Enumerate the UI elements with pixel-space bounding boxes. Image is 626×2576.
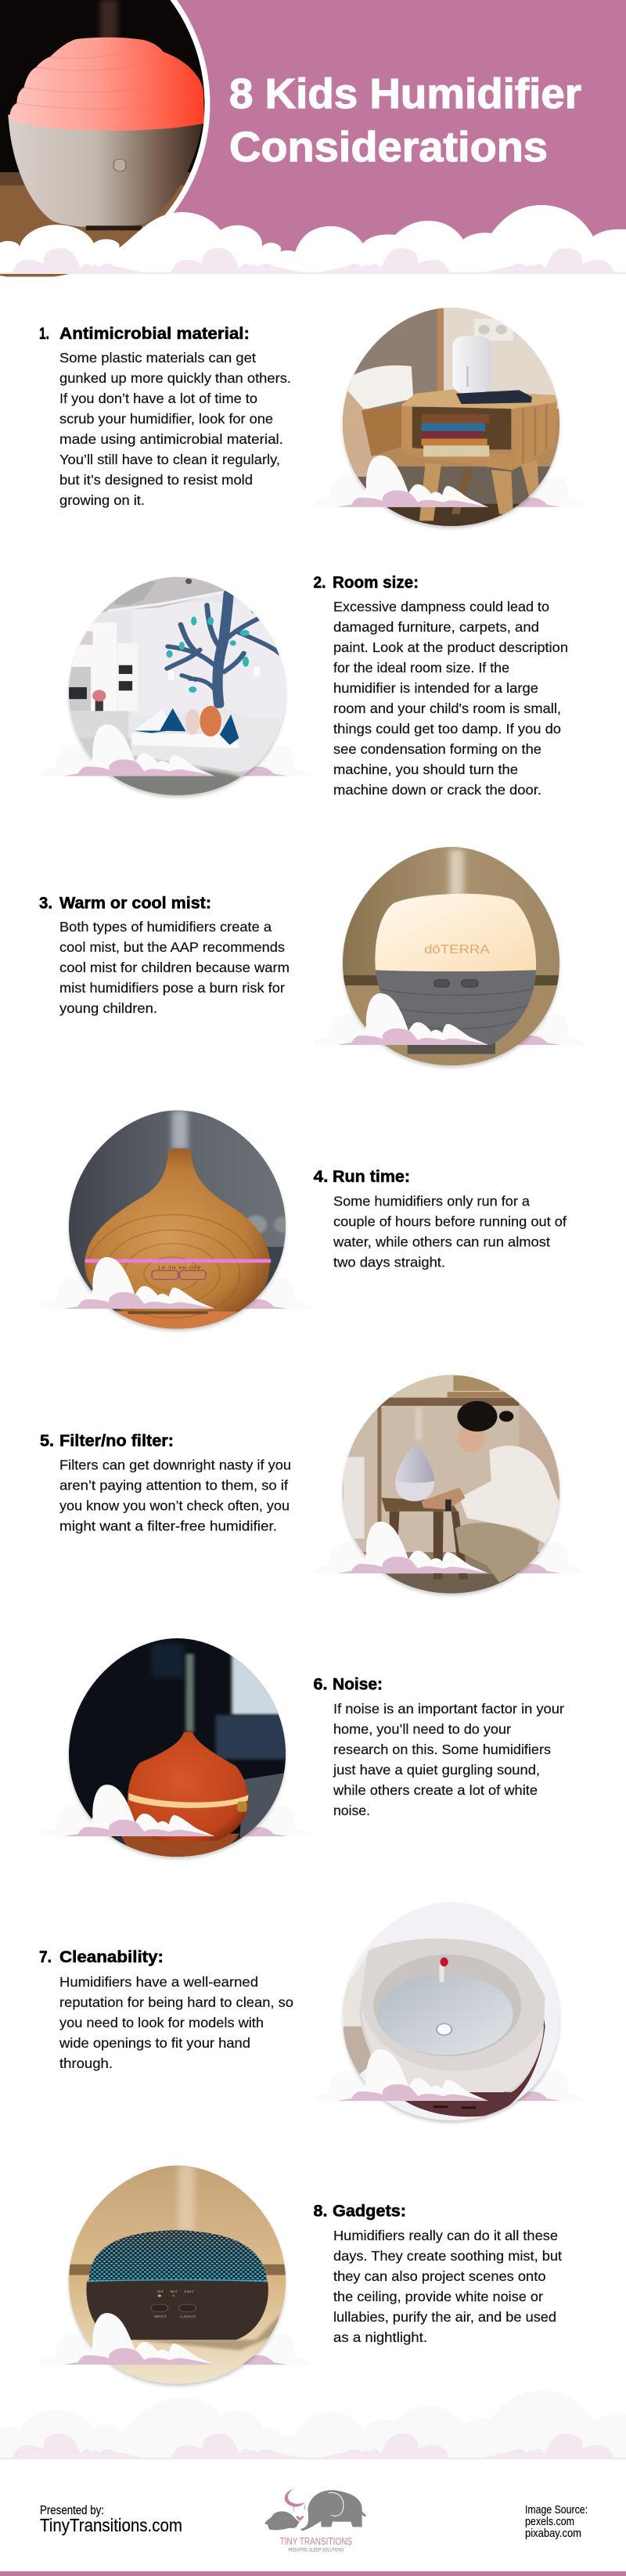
footer: [40, 2488, 588, 2553]
heading 2: 2.: [313, 573, 326, 592]
cloud behind photo: [39, 1805, 313, 1836]
body text 2: machine down or crack the door.: [333, 782, 541, 798]
body text 8: Humidifiers really can do it all these: [333, 2228, 558, 2243]
image source: [525, 2503, 588, 2540]
body text 2: things could get too damp. If you do: [333, 721, 561, 737]
heading 7: 7.: [39, 1947, 52, 1966]
body text 2: machine, you should turn the: [333, 762, 518, 777]
body text 4: two days straight.: [333, 1254, 445, 1270]
heading 8: 8.: [313, 2201, 327, 2220]
cloud in front of photo: [64, 1257, 214, 1309]
body text 4: Some humidifiers only run for a: [333, 1193, 530, 1209]
body text 8: lullabies, purify the air, and be used: [333, 2309, 556, 2325]
heading 5: Filter/no filter:: [59, 1431, 174, 1450]
image source: Image Source:: [525, 2503, 588, 2517]
pale pink clouds: [0, 248, 626, 274]
image source: pexels.com: [525, 2515, 574, 2528]
header banner: [0, 0, 626, 281]
panel: 1 antimicrobial material: [39, 308, 586, 528]
cloud in front of photo: [337, 2049, 488, 2101]
body text 3: cool mist, but the AAP recommends: [59, 939, 285, 955]
title: 8 Kids Humidifier: [229, 70, 581, 117]
heading 3: 3.: [39, 894, 52, 913]
body text 1: You’ll still have to clean it regularly,: [59, 452, 280, 467]
body text 5: might want a filter-free humidifier.: [59, 1519, 277, 1534]
panel: 5 filter or no filter: [40, 1374, 586, 1596]
timer labels on device: 1H 3H 6H OFF: [158, 1266, 201, 1270]
cloud behind photo: [39, 744, 313, 776]
white cloud band: [0, 205, 626, 274]
cloud in front of photo: [64, 724, 214, 776]
heading 1: 1.: [39, 324, 49, 343]
heading 6: 6.: [313, 1675, 327, 1694]
body text 6: home, you’ll need to do your: [333, 1721, 511, 1737]
body text 2: damaged furniture, carpets, and: [333, 619, 539, 635]
cloud behind photo: [312, 1014, 586, 1045]
photo: open humidifier tank: [341, 1902, 560, 2124]
cloud in front of photo: [337, 456, 488, 507]
heading 6: Noise:: [333, 1675, 383, 1694]
body text 1: but it’s designed to resist mold: [59, 472, 253, 488]
panel: 8 gadgets: [39, 2164, 562, 2386]
body text 8: [333, 2228, 562, 2345]
heading 4: Run time:: [333, 1167, 410, 1186]
body text 7: you need to look for models with: [59, 2015, 264, 2030]
heading 5: 5.: [40, 1431, 54, 1450]
body text 8: as a nightlight.: [333, 2329, 427, 2345]
presented by: Presented by:: [40, 2504, 104, 2517]
body text 3: young children.: [59, 1000, 157, 1016]
presented by: [40, 2504, 182, 2535]
body text 8: they can also project scenes onto: [333, 2268, 546, 2284]
body text 6: while others create a lot of white: [333, 1782, 538, 1798]
device labels: MIST: [154, 2315, 167, 2319]
panel: 7 cleanability: [39, 1902, 586, 2124]
header background: [0, 0, 626, 274]
body text 5: aren’t paying attention to them, so if: [59, 1478, 288, 1493]
body text 2: Excessive dampness could lead to: [333, 599, 549, 614]
body text 4: [333, 1193, 567, 1270]
body text 7: through.: [59, 2055, 113, 2071]
body text 8: the ceiling, provide white noise or: [333, 2289, 543, 2304]
body text 3: [59, 919, 290, 1016]
body text 7: wide openings to fit your hand: [59, 2035, 250, 2051]
body text 1: If you don’t have a lot of time to: [59, 391, 257, 406]
device labels: 2H: [156, 2290, 164, 2293]
logo: Tiny Transitions elephants: [264, 2488, 367, 2553]
body text 6: research on this. Some humidifiers: [333, 1742, 551, 1757]
device labels: [154, 2290, 196, 2319]
cloud behind photo: [312, 2070, 586, 2101]
heading 4: 4.: [313, 1167, 329, 1186]
body text 6: If noise is an important factor in your: [333, 1701, 564, 1717]
heading 7: Cleanability:: [59, 1947, 164, 1966]
heading 8: Gadgets:: [333, 2201, 406, 2220]
body text 3: Both types of humidifiers create a: [59, 919, 272, 935]
heading 1: Antimicrobial material:: [59, 324, 250, 343]
panel: 3 warm or cool mist: [39, 847, 586, 1068]
photo: dark mesh diffuser: [69, 2164, 286, 2386]
heading 2: Room size:: [333, 573, 419, 592]
image source: pixabay.com: [525, 2527, 581, 2540]
body text 2: [333, 599, 568, 798]
hero photo: glowing pink humidifier: [0, 0, 224, 276]
body text 2: see condensation forming on the: [333, 741, 541, 757]
cloud behind photo: [312, 476, 586, 507]
body text 7: [59, 1974, 293, 2071]
body text 3: cool mist for children because warm: [59, 960, 290, 975]
presented by: TinyTransitions.com: [40, 2515, 182, 2535]
body text 5: you know you won’t check often, you: [59, 1498, 290, 1514]
body text 6: noise.: [333, 1803, 370, 1818]
body text 2: for the ideal room size. If the: [333, 660, 509, 676]
cloud in front of photo: [64, 1785, 214, 1836]
brand text on device: dōTERRA: [424, 942, 490, 957]
bottom bar: [0, 2571, 626, 2576]
device labels: 10H: [184, 2290, 193, 2293]
photo: doTERRA humidifier: [343, 847, 560, 1068]
body text 7: Humidifiers have a well-earned: [59, 1974, 258, 1990]
photo: nursery with tree mural: [69, 577, 286, 802]
panel: 6 noise: [39, 1638, 564, 1862]
body text 1: scrub your humidifier, look for one: [59, 411, 273, 427]
body text 8: days. They create soothing mist, but: [333, 2248, 562, 2264]
logo: Tiny Transitions elephants: PEDIATRIC SLEEP SOLUTIONS: [288, 2547, 344, 2553]
device labels: LIGHT: [181, 2315, 196, 2319]
photo: wood grain diffuser: [69, 1110, 293, 1333]
footer cloud band: [0, 2390, 626, 2459]
photo: humidifier on bedside table: [343, 308, 560, 528]
body text 6: just have a quiet gurgling sound,: [333, 1762, 540, 1778]
body text 2: paint. Look at the product description: [333, 639, 568, 655]
body text 6: [333, 1701, 564, 1818]
device labels: 5H: [171, 2290, 177, 2293]
cloud in front of photo: [337, 993, 488, 1045]
body text 1: Some plastic materials can get: [59, 350, 256, 366]
panel: 4 run time: [39, 1110, 567, 1333]
body text 4: water, while others can run almost: [333, 1234, 550, 1249]
body text 1: gunked up more quickly than others.: [59, 370, 291, 386]
cloud behind photo: [39, 1277, 313, 1309]
cloud in front of photo: [64, 2313, 214, 2365]
heading 3: Warm or cool mist:: [59, 894, 211, 913]
body text 3: mist humidifiers pose a burn risk for: [59, 980, 285, 996]
panel: 2 room size: [39, 573, 568, 802]
hero photo frame: [0, 0, 207, 281]
photo: red wood diffuser: [69, 1638, 288, 1862]
logo: Tiny Transitions elephants: TINY TRANSITIONS: [280, 2535, 352, 2547]
body text 1: growing on it.: [59, 492, 145, 508]
body text 5: Filters can get downright nasty if you: [59, 1457, 291, 1473]
cloud behind photo: [39, 2333, 313, 2365]
body text 2: humidifier is intended for a large: [333, 680, 538, 696]
title: [229, 70, 581, 171]
body text 7: reputation for being hard to clean, so: [59, 1994, 293, 2010]
body text 1: made using antimicrobial material.: [59, 431, 283, 447]
cloud behind photo: [312, 1542, 586, 1573]
photo: person adjusting humidifier: [343, 1374, 560, 1596]
body text 4: couple of hours before running out of: [333, 1213, 567, 1229]
body text 1: [59, 350, 291, 508]
body text 2: room and your child's room is small,: [333, 701, 561, 716]
title: Considerations: [229, 124, 548, 171]
cloud in front of photo: [337, 1522, 488, 1573]
body text 5: [59, 1457, 291, 1534]
